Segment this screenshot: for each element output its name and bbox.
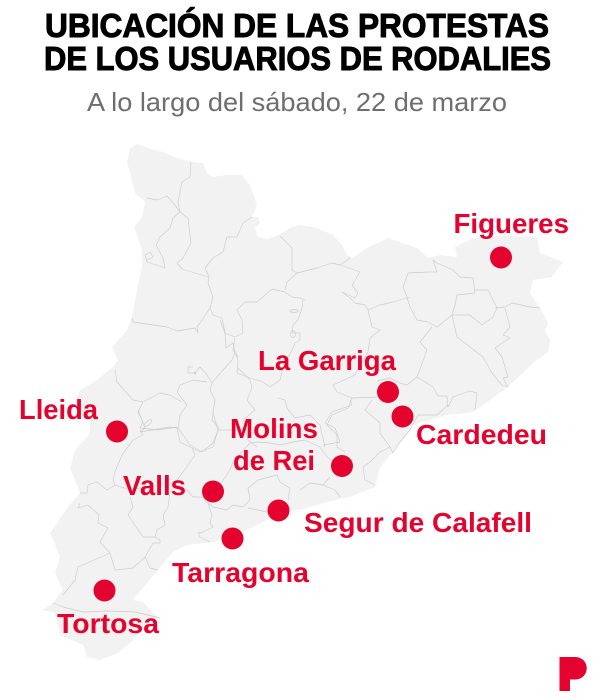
location: Molins de Rei [230, 413, 353, 477]
location: Cardedeu [392, 406, 547, 450]
title: UBICACIÓN DE LAS PROTESTAS [45, 7, 549, 45]
location: Lleida: Lleida [19, 394, 99, 425]
location: Figueres [454, 208, 569, 268]
location: Figueres: Figueres [454, 208, 569, 239]
location: Tortosa: Tortosa [57, 608, 160, 639]
location: Tarragona [172, 528, 310, 588]
location: Cardedeu: Cardedeu [416, 419, 547, 450]
location: Tortosa [57, 580, 160, 639]
icon: publisher logo [560, 657, 587, 691]
location: Valls [123, 470, 224, 502]
location: Molins de Rei: de Rei [233, 445, 315, 476]
location: Lleida [19, 394, 128, 442]
location: Segur de Calafell: Segur de Calafell [304, 507, 532, 538]
location: Tarragona: Tarragona [172, 557, 310, 588]
county boundaries [53, 162, 540, 618]
subtitle: A lo largo del sábado, 22 de marzo [87, 87, 507, 117]
map: Catalonia [42, 144, 563, 660]
map landmass [42, 144, 563, 660]
title: DE LOS USUARIOS DE RODALIES [44, 41, 551, 78]
location: Segur de Calafell [268, 500, 532, 538]
location: La Garriga [258, 345, 399, 403]
location: Molins de Rei: Molins [230, 413, 318, 444]
location: La Garriga: La Garriga [258, 345, 397, 376]
title [44, 7, 551, 78]
location: Valls: Valls [123, 470, 186, 501]
